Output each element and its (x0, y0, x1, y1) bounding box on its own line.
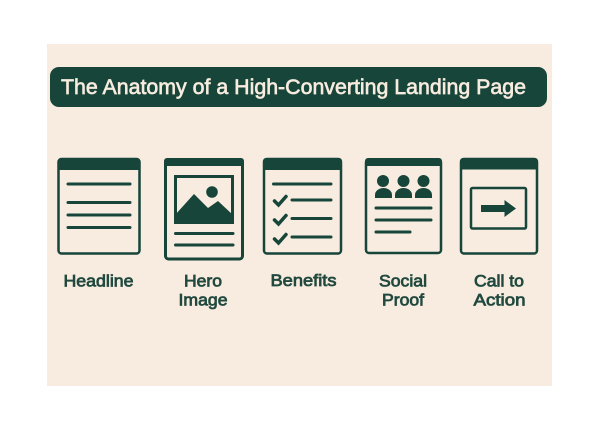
label: Social Proof (379, 272, 427, 310)
label: Hero Image: Hero (184, 272, 222, 290)
label: Call to Action (474, 272, 526, 310)
label: Social Proof: Proof (382, 292, 424, 310)
title: The Anatomy of a High-Converting Landing Page (61, 75, 526, 99)
icon: call to action page (460, 158, 538, 254)
label: Hero Image (178, 272, 228, 310)
icon: benefits checklist page (263, 158, 342, 254)
title banner (50, 67, 547, 107)
label: Headline: Headline (64, 272, 134, 290)
label: Benefits: Benefits (270, 272, 336, 290)
label: Call to Action: Action (474, 292, 526, 310)
label: Social Proof: Social (379, 272, 427, 290)
icon: social proof page (365, 158, 442, 253)
panel: cream background (47, 44, 552, 386)
icon: headline page (58, 158, 140, 254)
label: Hero Image: Image (178, 292, 228, 310)
icon: hero image page (164, 158, 244, 259)
label: Call to Action: Call to (474, 272, 524, 290)
